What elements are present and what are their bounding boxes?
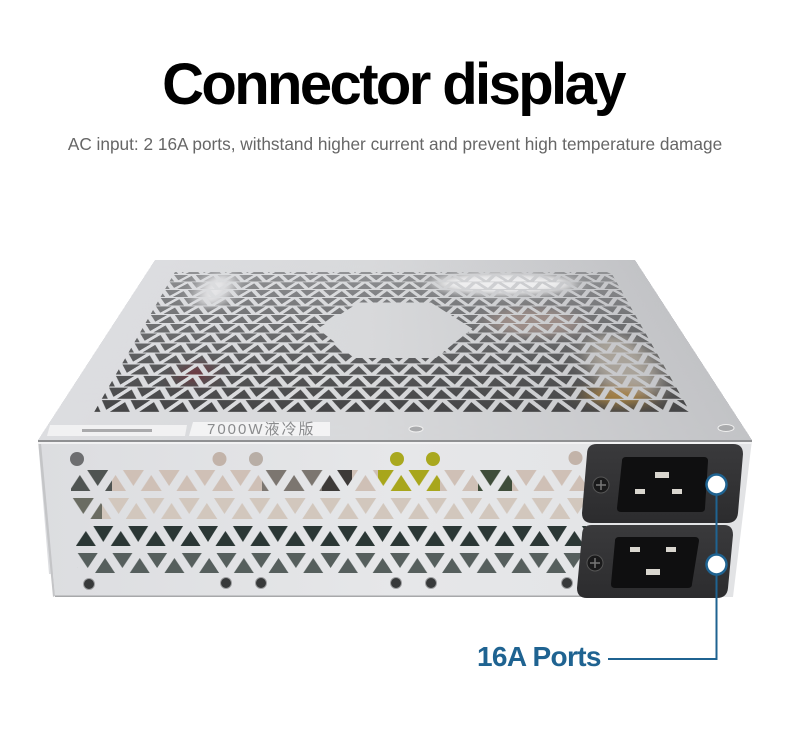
callout label: 16A Ports [477, 641, 601, 672]
socket [611, 537, 699, 588]
subtitle: AC input: 2 16A ports, withstand higher current and prevent high temperature damage [68, 134, 722, 154]
callout leader line [608, 495, 716, 659]
panel: perforated top plate of power supply [38, 260, 752, 440]
pins [630, 547, 676, 575]
sticker: model label: 7000W液冷版 [207, 421, 316, 438]
callout marker: lower port [706, 554, 726, 574]
vent holes, top row [70, 451, 582, 466]
title: Connector display [162, 52, 624, 117]
lower AC connector [577, 525, 733, 598]
sticker: company label [47, 425, 187, 436]
icon: screw [587, 555, 603, 571]
rivets, bottom row [84, 578, 572, 590]
icon: screw [593, 477, 609, 493]
upper AC connector [582, 444, 743, 523]
icon: top plate screws [409, 424, 734, 432]
panel: front face of power supply [38, 440, 752, 597]
ventilation triangles [60, 468, 600, 575]
socket [617, 457, 708, 512]
callout marker: upper port [706, 474, 726, 494]
pins [635, 472, 682, 494]
